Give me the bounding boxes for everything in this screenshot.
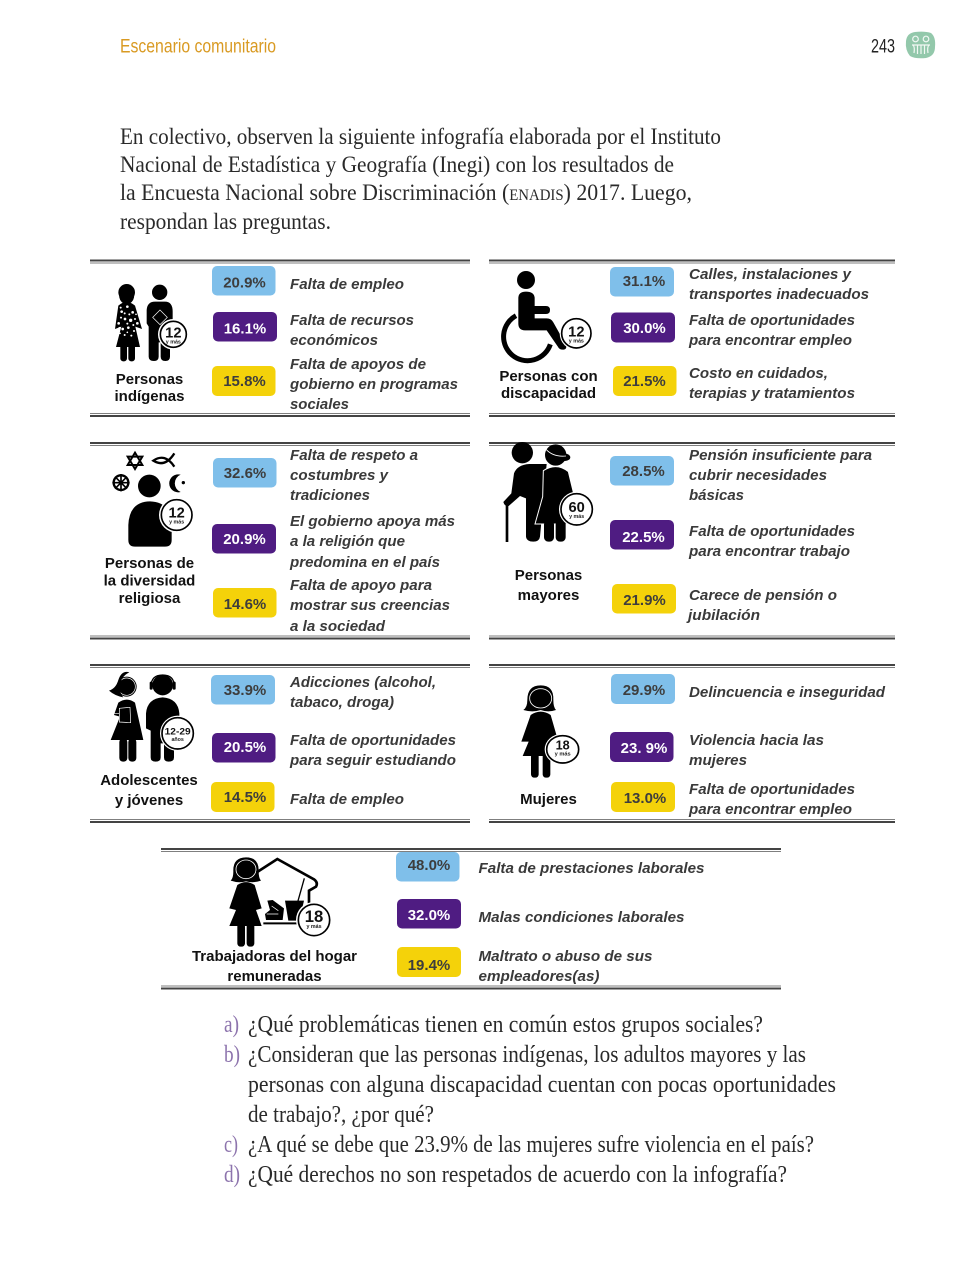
bucket and mop xyxy=(285,878,304,921)
text: maltrato xyxy=(478,948,652,985)
panel: mujeres xyxy=(489,665,895,822)
text: respeto a costumbres xyxy=(290,447,418,504)
label: la diversidad xyxy=(104,572,195,590)
stat 21.5%: 21.5% xyxy=(623,373,666,390)
stat 29.9%: 29.9% xyxy=(623,682,665,699)
text: oportunidades de empleo: para encontrar empleo xyxy=(688,332,852,349)
text: apoyo para creencias xyxy=(290,577,450,635)
text: oportunidades de trabajo: Falta de oportunidades xyxy=(689,523,855,540)
label: Personas xyxy=(116,371,183,388)
text: oportunidades de estudio: Falta de oportunidades xyxy=(290,732,456,749)
icon: girl and boy, 12 to 29 years xyxy=(109,672,195,762)
badge: 12 y más xyxy=(158,319,189,350)
label: discapacidad xyxy=(501,385,596,402)
icon: domestic worker and house, 18 and over xyxy=(229,857,332,947)
text: calles e instalaciones: Calles, instalaciones y xyxy=(689,266,852,283)
stat 28.5% xyxy=(610,456,674,486)
stat 20.9%: 20.9% xyxy=(223,531,266,548)
stat 21.5% xyxy=(613,366,676,396)
text: violencia: mujeres xyxy=(689,752,747,769)
stat 14.6% xyxy=(213,588,276,618)
label xyxy=(104,555,195,607)
panel: personas de la diversidad religiosa xyxy=(90,443,470,638)
questions list: ¿A qué se debe que 23.9% de las mujeres sufre violencia en el país? xyxy=(248,1132,814,1158)
icon: woman, 18 and over xyxy=(521,685,581,778)
section header: Escenario comunitario xyxy=(120,36,276,58)
text: apoyo para creencias: mostrar sus creencias xyxy=(290,597,450,614)
symbol: crescent moon xyxy=(169,474,185,492)
text: pensión insuficiente: cubrir necesidades xyxy=(689,467,827,484)
badge: 18 y más: 18 xyxy=(556,738,570,752)
intro paragraph: la Encuesta Nacional sobre Discriminación (enadis) 2017. Luego, xyxy=(120,180,692,206)
questions list: a) xyxy=(224,1012,239,1038)
text: gobierno y religión: a la religión que xyxy=(290,533,405,550)
stat 28.5%: 28.5% xyxy=(622,463,665,480)
text: calles e instalaciones: transportes inadecuados xyxy=(689,286,869,303)
questions list: personas con alguna discapacidad cuentan con pocas oportunidades xyxy=(248,1072,836,1098)
text: calles e instalaciones xyxy=(689,266,869,303)
badge: 12-29 años xyxy=(160,716,195,751)
badge: 60 y más: 60 xyxy=(569,500,585,516)
panel: personas indígenas xyxy=(90,260,470,416)
stat 20.9% xyxy=(212,266,276,296)
intro paragraph xyxy=(120,124,721,235)
stat 33.9% xyxy=(211,675,275,704)
questions list xyxy=(224,1012,836,1188)
label xyxy=(100,772,198,809)
questions list: ¿Qué problemáticas tienen en común estos grupos sociales? xyxy=(248,1012,763,1038)
text: oportunidades de empleo: para encontrar empleo xyxy=(688,801,852,818)
stat 15.8%: 15.8% xyxy=(223,373,266,390)
stat 13.0%: 13.0% xyxy=(624,790,666,807)
icon: indigenous woman and man, 12 and over xyxy=(115,284,189,361)
text: apoyos de gobierno: sociales xyxy=(290,396,349,413)
stat 23. 9% xyxy=(610,732,674,762)
text: respeto a costumbres: tradiciones xyxy=(290,487,370,504)
stat 15.8% xyxy=(212,366,276,396)
questions list: b) xyxy=(224,1042,240,1068)
stat 16.1%: 16.1% xyxy=(224,320,266,338)
text: apoyo para creencias: Falta de apoyo para xyxy=(290,577,432,594)
text: respeto a costumbres: Falta de respeto a xyxy=(290,447,418,464)
badge: 60 y más: y más xyxy=(569,514,584,520)
badge: 12 y más: y más xyxy=(569,338,584,344)
stat 19.4% xyxy=(397,947,461,977)
badge: 18 y más xyxy=(545,734,581,765)
text: violencia xyxy=(689,732,824,769)
badge: 18 y más: y más xyxy=(306,924,322,930)
stat 33.9%: 33.9% xyxy=(224,682,266,699)
stat 20.5% xyxy=(212,733,276,762)
text: delincuencia: Delincuencia e inseguridad xyxy=(689,684,886,701)
text: adicciones: tabaco, droga) xyxy=(290,694,394,711)
stat 22.5%: 22.5% xyxy=(622,529,665,546)
text: recursos económicos: Falta de recursos xyxy=(290,312,414,329)
intro paragraph: En colectivo, observen la siguiente infografía elaborada por el Instituto xyxy=(120,124,721,150)
intro paragraph: Nacional de Estadística y Geografía (Inegi) con los resultados de xyxy=(120,152,674,178)
text: adicciones xyxy=(289,674,436,711)
icon: page emblem xyxy=(906,32,935,58)
text: falta de empleo: Falta de empleo xyxy=(290,276,404,293)
text: adicciones: Adicciones (alcohol, xyxy=(289,674,436,691)
text: apoyo para creencias: a la sociedad xyxy=(290,618,386,635)
label xyxy=(114,371,185,405)
label: Personas xyxy=(515,567,582,584)
label xyxy=(499,368,598,402)
label xyxy=(192,948,357,985)
text: oportunidades de empleo: Falta de oportunidades xyxy=(689,781,855,798)
text: oportunidades de empleo xyxy=(688,781,855,818)
panel: trabajadoras del hogar remuneradas xyxy=(161,849,781,988)
symbol: dharma wheel xyxy=(112,474,130,491)
icon: elderly couple, 60 and over xyxy=(503,442,594,542)
questions list: ¿Consideran que las personas indígenas, los adultos mayores y las xyxy=(248,1042,806,1068)
stat 31.1% xyxy=(610,267,674,296)
stat 14.5%: 14.5% xyxy=(224,789,266,806)
label: Adolescentes xyxy=(100,772,198,789)
text: oportunidades de empleo: Falta de oportunidades xyxy=(689,312,855,329)
symbol: star of David xyxy=(128,453,142,469)
text: gobierno y religión: El gobierno apoya más xyxy=(290,513,455,530)
text: apoyos de gobierno: Falta de apoyos de xyxy=(290,356,426,373)
badge: 12 y más: y más xyxy=(169,520,184,526)
label: Personas de xyxy=(105,555,194,572)
label: remuneradas xyxy=(227,968,322,985)
questions list: ¿Qué derechos no son respetados de acuerdo con la infografía? xyxy=(248,1162,787,1188)
panel: adolescentes y jóvenes xyxy=(90,665,470,822)
page number: 243 xyxy=(871,36,895,58)
text: recursos económicos: económicos xyxy=(290,332,378,349)
stat 32.6% xyxy=(213,458,276,488)
stat 48.0% xyxy=(396,852,460,882)
text: costo en cuidados: terapias y tratamientos xyxy=(689,385,855,402)
badge: 12-29 años: años xyxy=(171,737,184,743)
stat 48.0%: 48.0% xyxy=(408,857,450,874)
badge: 12 y más: y más xyxy=(166,339,181,345)
stat 23. 9%: 23. 9% xyxy=(621,740,667,757)
stat 20.5%: 20.5% xyxy=(224,739,266,756)
stat 21.9% xyxy=(612,584,676,614)
questions list: d) xyxy=(224,1162,240,1188)
badge: 12 y más: 12 xyxy=(568,324,584,340)
stat 22.5% xyxy=(610,520,674,550)
badge: 12 y más xyxy=(560,317,593,350)
label: Mujeres xyxy=(520,791,577,808)
house outline xyxy=(257,859,317,905)
text: pensión o jubilación xyxy=(686,587,837,624)
questions list: c) xyxy=(224,1132,238,1158)
stat 20.9% xyxy=(212,524,276,554)
text: maltrato: empleadores(as) xyxy=(478,968,600,985)
text: pensión insuficiente: Pensión insuficiente para xyxy=(689,447,872,464)
text: violencia: Violencia hacia las xyxy=(689,732,824,749)
symbol: fish xyxy=(153,453,174,467)
badge: 12-29 años: 12-29 xyxy=(165,727,191,737)
stat 29.9% xyxy=(611,674,675,704)
text: oportunidades de estudio: para seguir estudiando xyxy=(289,752,456,769)
text: respeto a costumbres: costumbres y xyxy=(290,467,389,484)
badge: 12 y más: 12 xyxy=(169,506,185,522)
badge: 18 y más xyxy=(296,902,332,938)
stat 14.6%: 14.6% xyxy=(224,596,266,613)
stat 32.0%: 32.0% xyxy=(408,907,450,924)
badge: 12 y más xyxy=(159,497,194,533)
stat 19.4%: 19.4% xyxy=(408,957,450,974)
text: gobierno y religión xyxy=(289,513,455,571)
text: maltrato: Maltrato o abuso de sus xyxy=(478,948,652,965)
text: prestaciones: Falta de prestaciones laborales xyxy=(478,860,704,877)
text: gobierno y religión: predomina en el país xyxy=(289,554,440,571)
text: costo en cuidados xyxy=(689,365,855,402)
stat 32.0% xyxy=(397,899,461,928)
text: oportunidades de trabajo: para encontrar trabajo xyxy=(688,543,850,560)
stat 30.0% xyxy=(611,312,675,342)
text: falta de empleo: Falta de empleo xyxy=(290,791,404,808)
questions list: de trabajo?, ¿por qué? xyxy=(248,1102,434,1128)
stat 21.9%: 21.9% xyxy=(623,592,666,609)
stat 16.1% xyxy=(213,312,277,342)
label: y jóvenes xyxy=(115,792,183,809)
panel: personas mayores xyxy=(489,442,895,638)
text: pensión insuficiente: básicas xyxy=(689,487,744,504)
intro paragraph: respondan las preguntas. xyxy=(120,209,331,235)
badge: 18 y más: y más xyxy=(555,751,571,757)
icon: wheelchair user, 12 and over xyxy=(504,271,593,361)
text: apoyos de gobierno xyxy=(289,356,458,413)
text: pensión o jubilación: jubilación xyxy=(686,607,760,624)
panel: personas con discapacidad xyxy=(489,260,895,416)
text: pensión o jubilación: Carece de pensión o xyxy=(689,587,837,604)
text: oportunidades de empleo xyxy=(688,312,855,349)
stat 30.0%: 30.0% xyxy=(623,320,666,337)
label: religiosa xyxy=(119,590,181,607)
text: apoyos de gobierno: gobierno en programas xyxy=(289,376,458,393)
text: oportunidades de estudio xyxy=(289,732,456,769)
label: Trabajadoras del hogar xyxy=(192,948,357,965)
stat 20.9%: 20.9% xyxy=(223,274,266,292)
label xyxy=(515,567,582,604)
text: condiciones: Malas condiciones laborales xyxy=(478,909,684,926)
gloves xyxy=(265,900,284,920)
label: Personas con xyxy=(499,368,598,385)
stat 13.0% xyxy=(611,782,675,812)
stat 32.6%: 32.6% xyxy=(224,465,266,482)
icon: person with religious symbols, 12 and over xyxy=(112,453,194,547)
text: recursos económicos xyxy=(290,312,414,349)
label: indígenas xyxy=(114,388,185,405)
text: oportunidades de trabajo xyxy=(688,523,855,560)
text: costo en cuidados: Costo en cuidados, xyxy=(689,365,828,382)
text: pensión insuficiente xyxy=(689,447,872,504)
badge: 60 y más xyxy=(559,492,594,527)
label: mayores xyxy=(518,587,579,604)
badge: 12 y más: 12 xyxy=(165,325,181,341)
stat 14.5% xyxy=(211,782,274,812)
stat 31.1%: 31.1% xyxy=(623,273,665,290)
badge: 18 y más: 18 xyxy=(305,907,323,926)
